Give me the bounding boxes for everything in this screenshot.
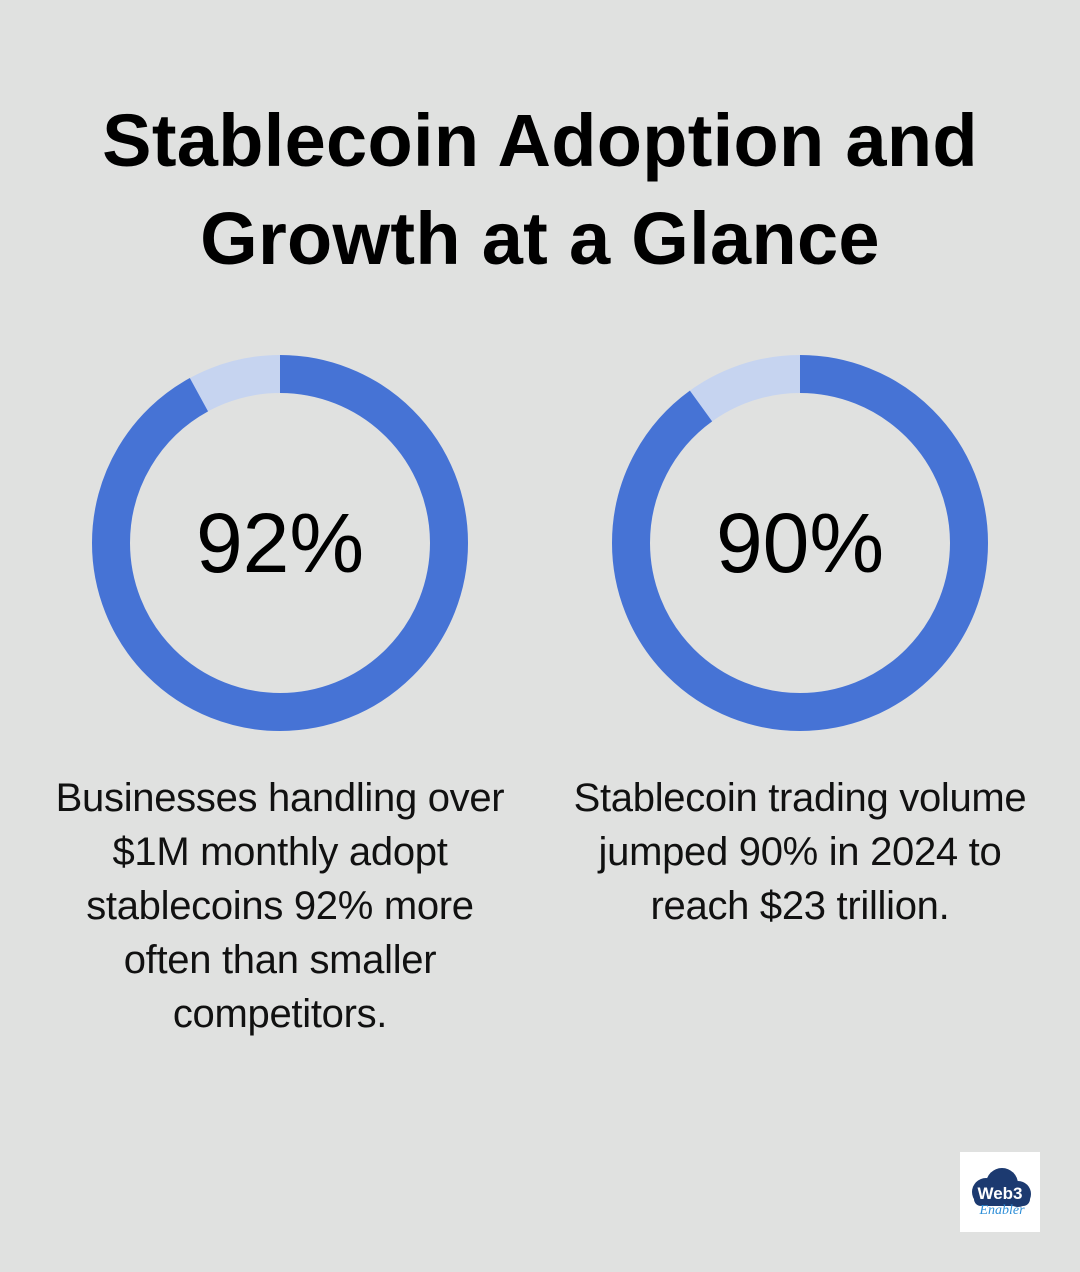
donut chart: 92% [92,355,468,731]
text: trading volume description: jumped 90% in 2024 to [599,830,1001,874]
text: businesses description: competitors. [173,992,387,1036]
text: trading volume description [574,776,1026,928]
title: Growth at a Glance [200,197,880,280]
title [102,99,978,280]
text: businesses description [56,776,504,1036]
value: 92%: 92% [196,496,364,590]
value: 90%: 90% [716,496,884,590]
logo: Web3: Enabler [978,1203,1025,1218]
text: businesses description: Businesses handling over [56,776,504,820]
text: businesses description: $1M monthly adopt [112,830,448,874]
logo: Web3 [960,1152,1040,1232]
text: businesses description: stablecoins 92% more [86,884,474,928]
text: trading volume description: reach $23 trillion. [651,884,949,928]
title: Stablecoin Adoption and [102,99,978,182]
logo: Web3: Web3 [977,1184,1023,1203]
donut chart: 90% [612,355,988,731]
text: trading volume description: Stablecoin trading volume [574,776,1026,820]
text: businesses description: often than smaller [124,938,436,982]
